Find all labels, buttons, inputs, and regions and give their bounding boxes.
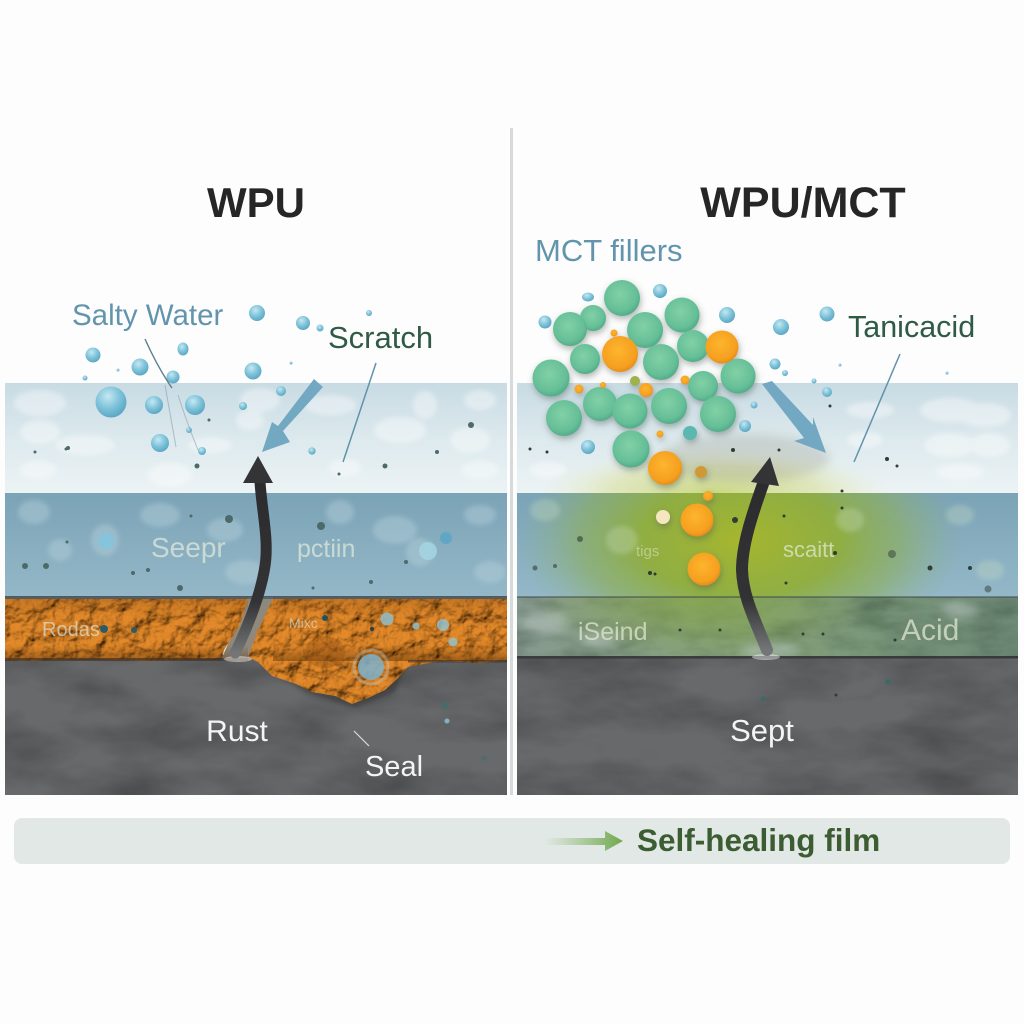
layer: top coating bbox=[5, 383, 507, 493]
specks bbox=[528, 404, 992, 702]
label: Scratch: Scratch bbox=[328, 320, 433, 355]
faint layer labels bbox=[578, 537, 959, 647]
label: Rodas: Rodas bbox=[42, 619, 100, 641]
blobs in middle layer bbox=[530, 499, 1004, 580]
layer: steel substrate bbox=[517, 658, 1018, 795]
label: in rust: Mixc bbox=[289, 615, 318, 631]
layer: top coating bbox=[517, 383, 1018, 493]
centre divider bbox=[510, 128, 513, 795]
specks bbox=[22, 418, 487, 761]
crack gap bbox=[222, 599, 275, 658]
legend bar: self-healing film bbox=[14, 818, 1010, 864]
shadow under rust pit bbox=[262, 664, 405, 708]
sealed film light patches bbox=[523, 602, 980, 658]
rust nodule and water droplet bbox=[305, 636, 388, 684]
seam between layers bbox=[517, 596, 1018, 598]
layer: rust bbox=[5, 596, 507, 704]
label: Seepr: Seepr bbox=[151, 532, 226, 563]
heading: WPU/MCT: WPU/MCT bbox=[700, 179, 906, 227]
line: tannic acid pointer bbox=[854, 354, 900, 462]
label: Salty Water: Salty Water bbox=[72, 299, 224, 332]
panel: WPU cross-section bbox=[5, 383, 507, 795]
droplets: right panel bbox=[538, 284, 948, 454]
layer: sealed film bbox=[517, 597, 1018, 658]
label: pctiin: pctiin bbox=[297, 535, 355, 563]
heading: WPU: WPU bbox=[207, 179, 305, 226]
label: garbled left: tigs bbox=[636, 543, 659, 560]
label: Acid: Acid bbox=[901, 614, 959, 647]
arrow: green bbox=[545, 831, 623, 851]
arrow: water ingress bbox=[262, 379, 323, 452]
trace: faint scratch lines bbox=[165, 385, 198, 450]
line: scratch pointer bbox=[343, 363, 376, 462]
layer: middle coating bbox=[517, 493, 1018, 597]
layer: steel substrate bbox=[5, 655, 507, 795]
healing glow bbox=[530, 431, 950, 644]
rust-layer droplets bbox=[380, 612, 458, 646]
arrow: corrosion path bbox=[224, 456, 273, 662]
label: scaitt: scaitt bbox=[783, 537, 834, 562]
pointer near Seal bbox=[354, 731, 369, 746]
label: Rust: Rust bbox=[206, 715, 269, 748]
label: Seal: Seal bbox=[365, 751, 423, 783]
droplets: salty water bbox=[82, 305, 372, 455]
faint layer labels bbox=[42, 532, 355, 641]
label: iSeind: iSeind bbox=[578, 618, 648, 646]
panel: WPU/MCT cross-section bbox=[517, 383, 1018, 795]
cluster: MCT filler spheres bbox=[532, 280, 756, 586]
line: salty water pointer bbox=[145, 339, 172, 388]
label: MCT fillers: MCT fillers bbox=[535, 233, 683, 268]
label: Sept: Sept bbox=[730, 713, 794, 748]
label: Tanicacid: Tanicacid bbox=[848, 310, 975, 344]
arrow: blocked corrosion path bbox=[742, 457, 780, 660]
label: Self-healing film: Self-healing film bbox=[637, 822, 880, 858]
arrow: filler release bbox=[762, 381, 826, 453]
layer: middle coating bbox=[5, 493, 507, 597]
